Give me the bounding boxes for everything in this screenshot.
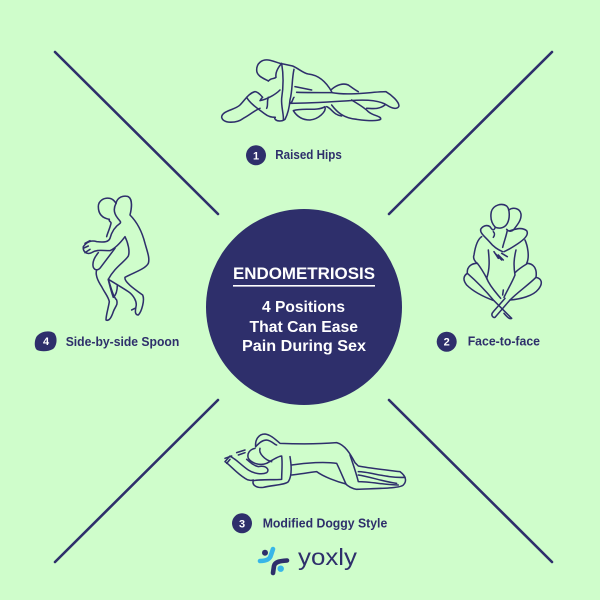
label 4: Side-by-side Spoon: Side-by-side Spoon: [66, 335, 179, 349]
label 1: Raised Hips: Raised Hips: [275, 148, 342, 162]
label 3: Modified Doggy Style: 3: [239, 518, 245, 530]
heading: ENDOMETRIOSIS: ENDOMETRIOSIS: [233, 264, 375, 283]
icon: side-by-side spoon figure: [83, 196, 149, 320]
label 1: Raised Hips: 1: [253, 150, 259, 162]
label 2: Face-to-face: [437, 332, 540, 352]
subtitle text: 4 Positions: [262, 299, 345, 316]
wordmark: yoxly: [298, 544, 358, 570]
logo: yoxly: [260, 544, 358, 573]
label 2: Face-to-face: 2: [444, 337, 450, 349]
icon: face-to-face figure: [464, 204, 541, 319]
label 1: Raised Hips: [246, 145, 342, 165]
label 3: Modified Doggy Style: [232, 513, 387, 533]
central title circle: [206, 209, 402, 405]
subtitle text: That Can Ease: [250, 319, 358, 336]
subtitle text: Pain During Sex: [242, 338, 366, 355]
subtitle text: [242, 299, 366, 355]
icon: modified doggy style figure: [225, 434, 406, 489]
icon: raised hips figure: [222, 60, 399, 122]
label 3: Modified Doggy Style: Modified Doggy Style: [263, 517, 387, 531]
label 4: Side-by-side Spoon: 4: [43, 336, 50, 348]
icon: yoxly mark: [260, 549, 287, 573]
label 4: Side-by-side Spoon: [35, 331, 179, 351]
label 2: Face-to-face: Face-to-face: [468, 334, 540, 348]
